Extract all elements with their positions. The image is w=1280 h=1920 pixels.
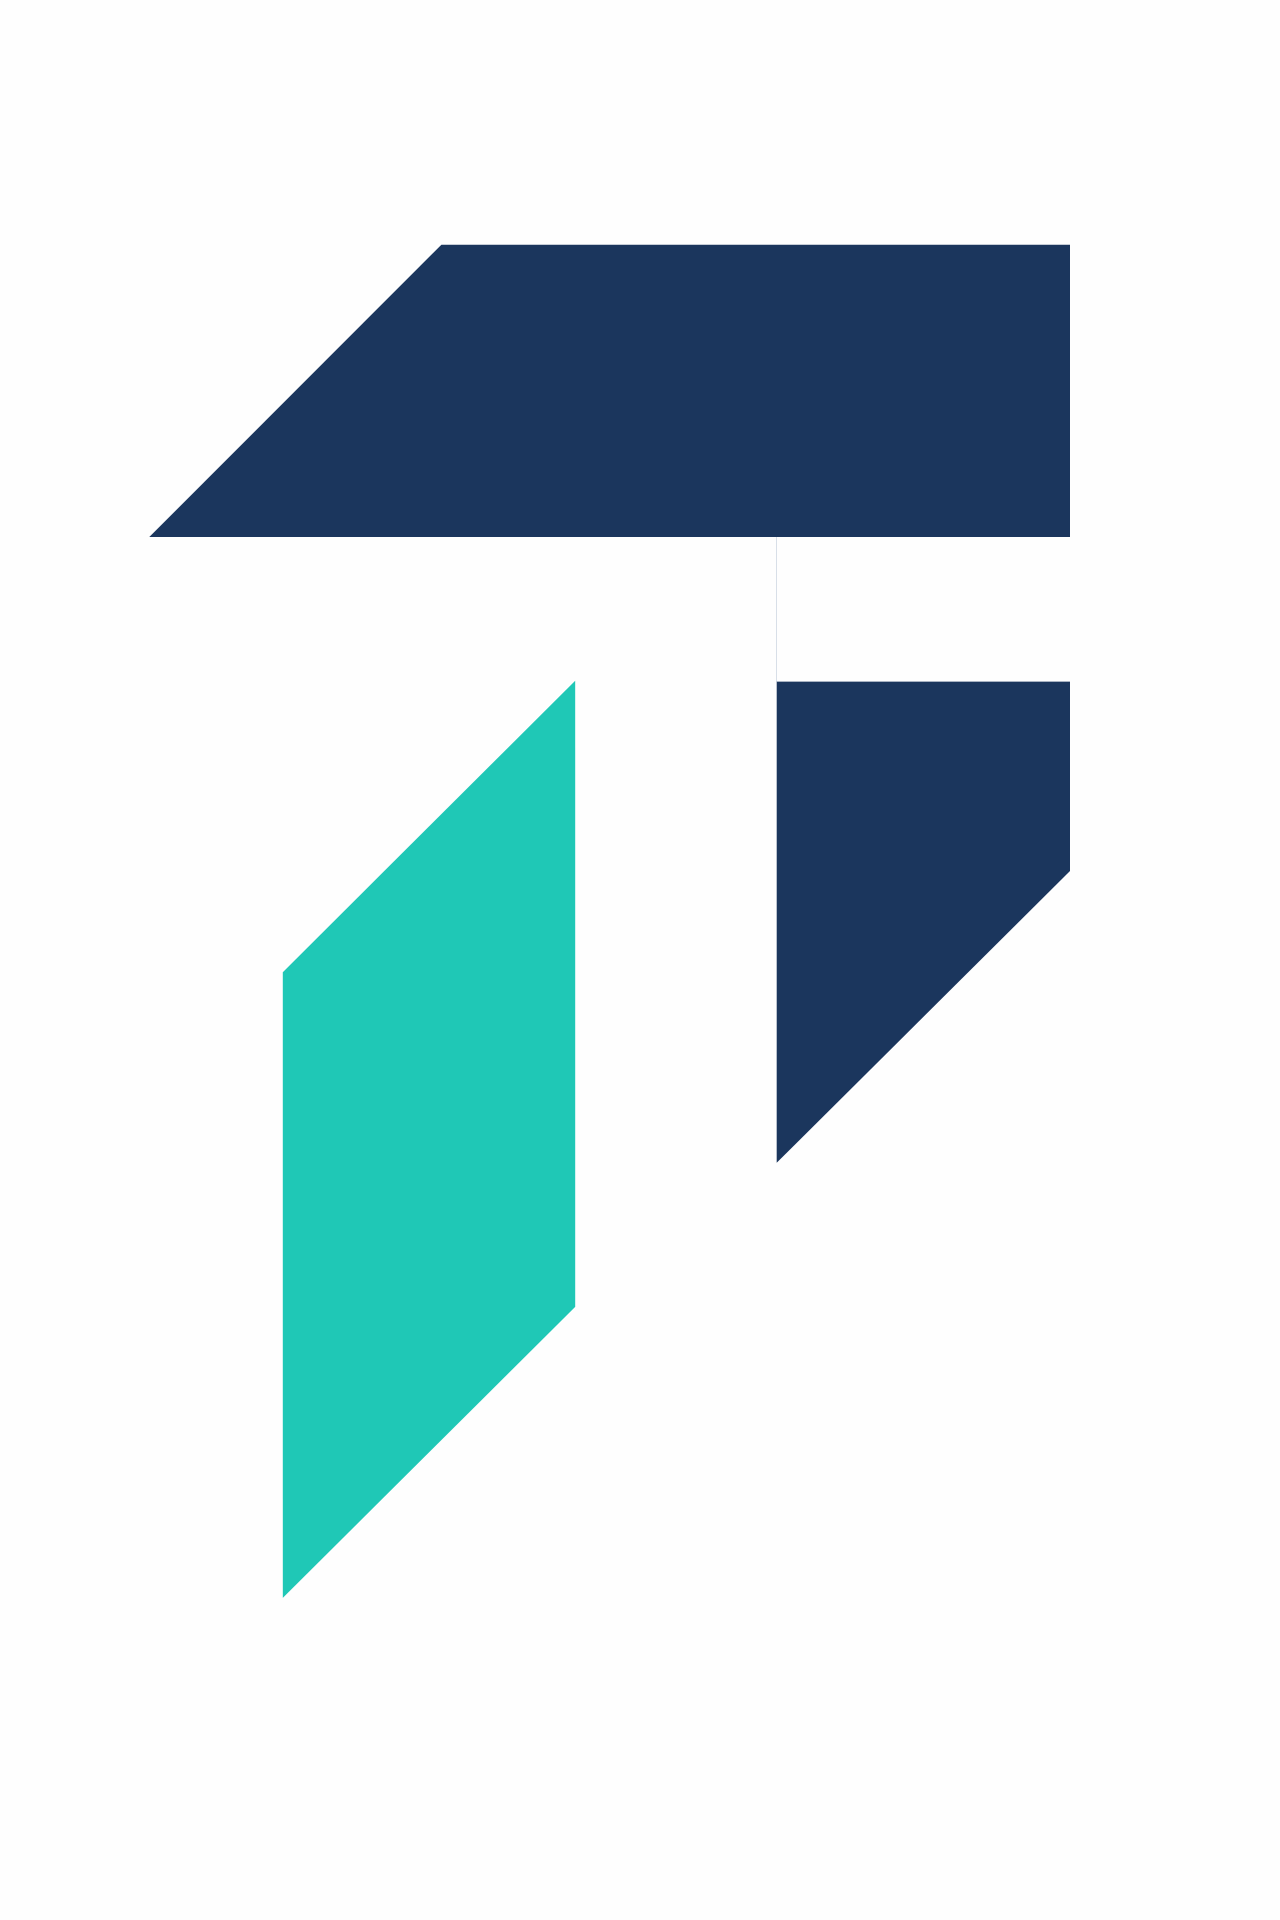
navy top bar with slanted left edge bbox=[149, 245, 1070, 537]
teal parallelogram bbox=[283, 681, 575, 1598]
hairline between top bar and lower navy block bbox=[776, 537, 778, 682]
navy lower right block bbox=[777, 682, 1070, 1163]
